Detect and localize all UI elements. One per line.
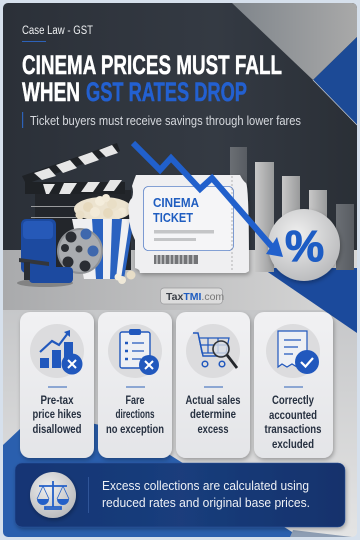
card text: accounted <box>269 408 317 422</box>
icon: clapperboard <box>22 143 131 270</box>
card text: excess <box>198 422 229 436</box>
card: pre-tax price hikes <box>20 312 94 458</box>
card text: Correctly <box>272 393 314 407</box>
icon: cart with magnifier <box>186 324 240 378</box>
card text: Pre-tax <box>40 393 74 407</box>
icon: percent disc: % <box>285 222 324 271</box>
callout text <box>102 478 310 510</box>
icon: scales <box>30 472 76 518</box>
card text: no exception <box>106 422 164 436</box>
card text <box>32 393 82 436</box>
card text <box>186 393 241 436</box>
arrow: falling price <box>133 143 283 257</box>
card text: Actual sales <box>186 393 241 407</box>
card: fare directions <box>98 312 172 458</box>
ticket label <box>153 195 200 225</box>
callout text: reduced rates and original base prices. <box>102 495 310 510</box>
illustration: bar chart backdrop <box>230 147 354 272</box>
card text <box>264 393 322 451</box>
title <box>22 50 282 107</box>
category label <box>22 25 93 42</box>
card: actual sales <box>176 312 250 458</box>
icon: film reel <box>57 228 103 274</box>
category label: Case Law - GST <box>22 25 93 37</box>
callout panel <box>15 463 345 527</box>
card text: transactions <box>264 422 322 436</box>
card text: excluded <box>272 437 314 451</box>
icon: receipt with check <box>266 324 320 378</box>
icon: percent disc <box>268 209 340 281</box>
icon: rising bars with cross <box>30 324 84 378</box>
icon: cinema ticket <box>128 175 249 273</box>
ticket label: TICKET <box>153 210 193 225</box>
subtitle: Ticket buyers must receive savings through lower fares <box>30 114 301 128</box>
card: correctly accounted <box>254 312 333 458</box>
title: WHEN <box>22 77 80 107</box>
icon: clipboard with cross <box>108 324 162 378</box>
card text <box>106 393 164 436</box>
ticket label: CINEMA <box>153 195 200 210</box>
icon: cinema seat <box>17 219 73 287</box>
icon: popcorn bucket <box>72 194 136 284</box>
card text: disallowed <box>32 422 82 436</box>
card text: price hikes <box>32 407 82 421</box>
card text: directions <box>116 407 155 421</box>
callout text: Excess collections are calculated using <box>102 478 309 493</box>
watermark: TaxTMI.com <box>166 291 224 303</box>
title: GST RATES DROP <box>86 77 247 107</box>
card text: determine <box>190 407 236 421</box>
watermark <box>160 288 224 304</box>
card text: Fare <box>126 393 145 407</box>
